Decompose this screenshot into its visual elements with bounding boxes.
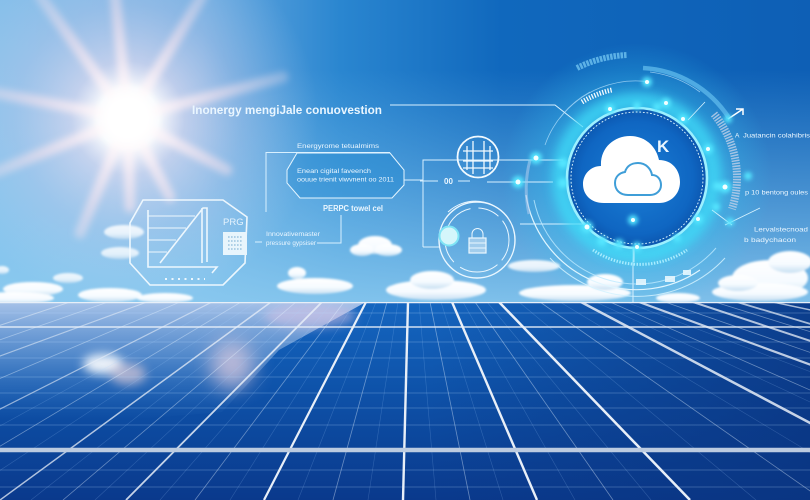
clouds bbox=[0, 225, 810, 304]
hub glow ring bbox=[560, 101, 714, 255]
right labels: Juatancin colahibris bbox=[743, 132, 810, 140]
connector lines bbox=[255, 105, 633, 302]
sky background bbox=[0, 0, 810, 304]
node highlights bbox=[516, 80, 728, 249]
cloud hub bbox=[512, 55, 760, 296]
right labels: Lervalstecnoad bbox=[754, 226, 808, 234]
hub disk bbox=[567, 108, 707, 248]
panel frame rails bbox=[0, 302, 810, 500]
glowing nodes bbox=[512, 77, 752, 252]
label: innovative master bbox=[266, 232, 320, 247]
right labels: b badychacon bbox=[744, 237, 796, 244]
label: innovative master: pressure gypsiser bbox=[266, 241, 316, 247]
icon: grid globe bbox=[458, 136, 498, 178]
sun with rays bbox=[0, 0, 420, 340]
title: Inonergy mengiJale conuovestion bbox=[192, 105, 382, 117]
hub dashed ring bbox=[571, 112, 703, 244]
icon: white cloud bbox=[583, 136, 680, 203]
cell grid vertical lines bbox=[0, 302, 810, 500]
label: innovative master: Innovativemaster bbox=[266, 232, 320, 238]
label: energy box heading: Energyrome tetualmims bbox=[297, 143, 379, 150]
right labels: A bbox=[735, 132, 740, 140]
label: 00: 00 bbox=[444, 177, 453, 186]
callout: energy box: Enean cigital faveench bbox=[297, 168, 372, 175]
label: PERPC: PERPC towel cel bbox=[323, 204, 383, 213]
panel base colour and reflections bbox=[0, 302, 810, 500]
solar panel array bbox=[0, 302, 810, 500]
icon: PRG panel device bbox=[130, 200, 247, 285]
icon: lock ring bbox=[439, 201, 515, 278]
hub arc blocks bbox=[636, 270, 691, 285]
arrow bbox=[728, 109, 743, 119]
callout: energy box: oouue trienit viwvnent oo 2011 bbox=[297, 176, 395, 184]
label: K: K bbox=[657, 137, 670, 156]
outer arcs bbox=[526, 55, 760, 296]
cell grid horizontal lines bbox=[0, 313, 810, 487]
icon: PRG panel device: PRG bbox=[223, 217, 244, 228]
brighter panel mid lines bbox=[0, 302, 810, 500]
right labels bbox=[735, 132, 810, 244]
right labels: p 10 bentong oules bbox=[745, 190, 809, 196]
callout: energy box bbox=[287, 153, 404, 198]
